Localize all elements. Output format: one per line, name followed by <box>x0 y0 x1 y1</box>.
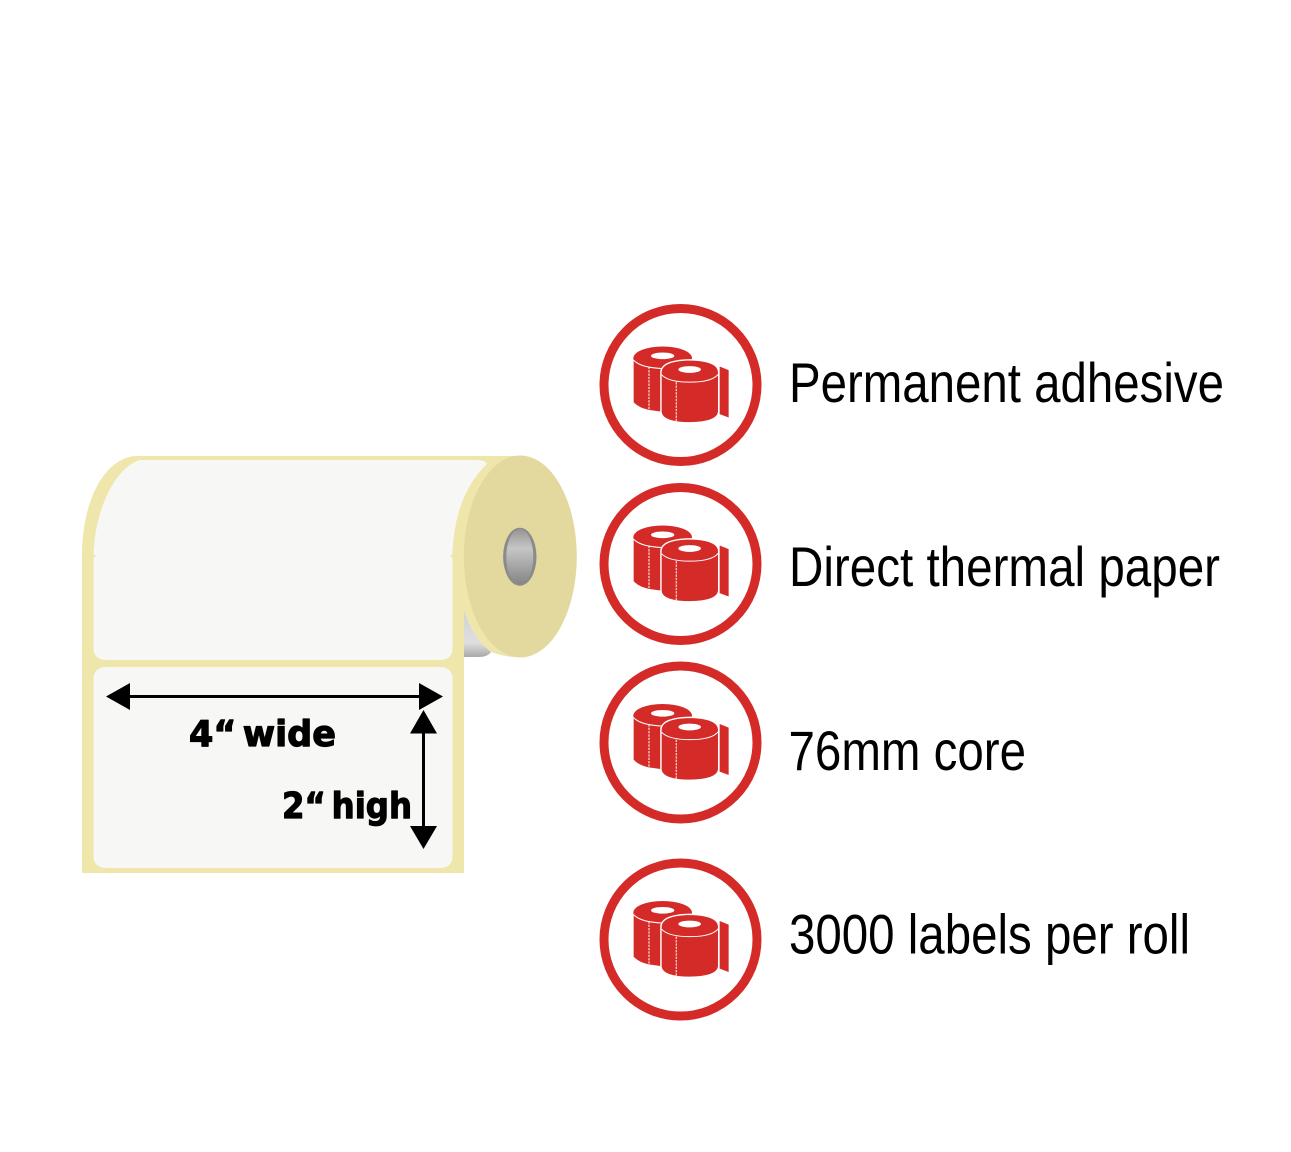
text: 76mm core: 76mm core <box>788 719 1026 782</box>
unrolled label one <box>94 460 487 660</box>
panel: feature 4 3000 labels per roll <box>604 863 1190 1016</box>
text: width label: 4“ wide <box>189 714 336 755</box>
roll end face <box>464 456 577 658</box>
panel: feature 1 permanent adhesive <box>604 308 1224 462</box>
icon: label rolls badge <box>604 308 757 462</box>
text: height label: 2“ high <box>282 786 412 827</box>
text: 3000 labels per roll: 3000 labels per roll <box>789 902 1190 966</box>
arrow: height dimension <box>410 710 437 849</box>
icon: label rolls badge <box>604 666 757 819</box>
text: direct thermal paper: Direct thermal paper <box>789 535 1220 598</box>
panel: feature 3 76mm core <box>604 666 1026 819</box>
icon: label rolls badge <box>604 488 757 640</box>
icon: label rolls badge <box>604 863 757 1016</box>
panel: label roll illustration <box>82 456 577 873</box>
roll backing paper <box>82 456 520 873</box>
arrow: width dimension <box>106 683 443 710</box>
text: permanent adhesive: Permanent adhesive <box>789 351 1224 414</box>
icon: core hole <box>503 528 536 586</box>
cardboard core tube <box>464 610 491 657</box>
panel: feature 2 direct thermal paper <box>604 488 1220 640</box>
unrolled label two <box>94 667 452 868</box>
